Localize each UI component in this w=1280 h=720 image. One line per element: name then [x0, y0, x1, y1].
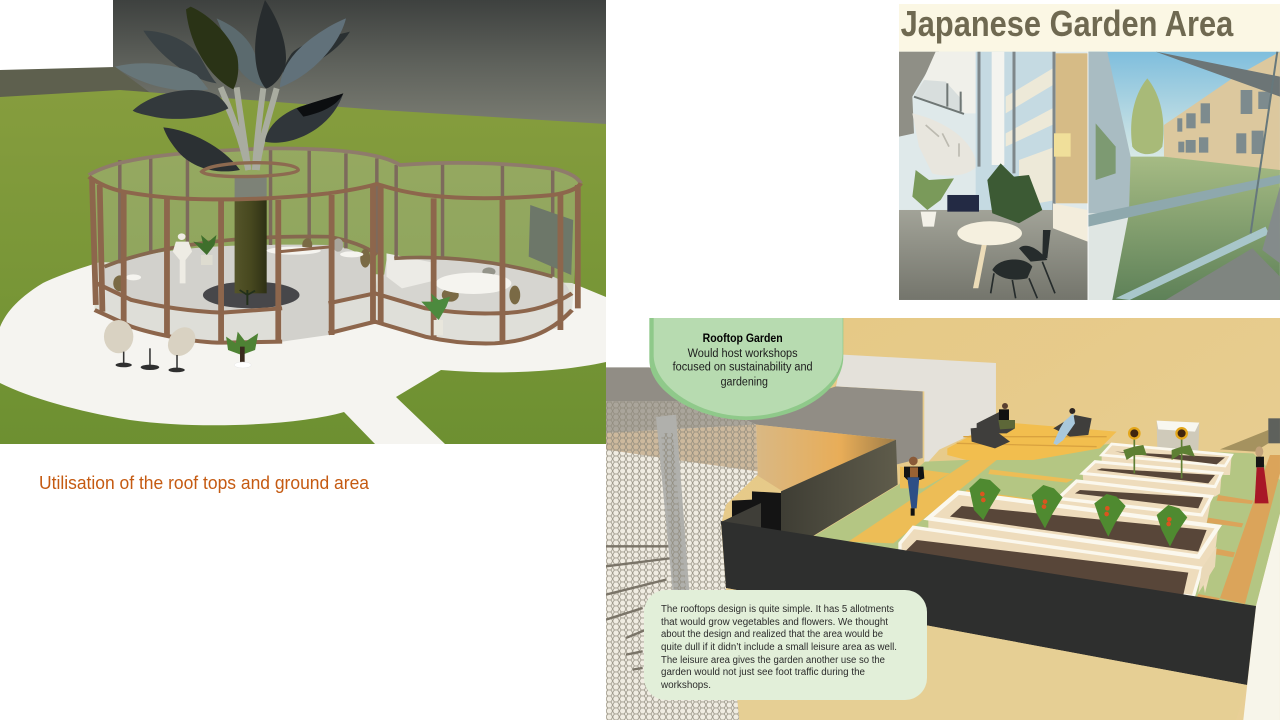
ceiling	[899, 52, 939, 137]
building	[1164, 52, 1280, 173]
inner chairs and tables	[113, 238, 520, 304]
caption: Utilisation of the roof tops and ground area	[39, 473, 370, 493]
floor	[899, 210, 1088, 300]
small seedling in pit	[240, 290, 255, 305]
back leaves	[143, 18, 350, 87]
egg chair left	[104, 320, 133, 367]
callout text: Would host workshops	[688, 346, 798, 360]
plant in pot	[193, 235, 216, 265]
potted palm outside	[226, 332, 258, 368]
lawn	[0, 90, 606, 444]
sofas	[947, 195, 979, 212]
green floor	[813, 443, 1280, 606]
tomato plants	[969, 478, 1187, 547]
dark grey planter wall	[721, 521, 1256, 685]
spiral stair lower	[912, 113, 976, 176]
brick pier	[1056, 53, 1088, 203]
callout: rooftop design description: The leisure area gives the garden another use so the	[661, 655, 885, 666]
white stone block	[836, 355, 996, 466]
pavilion interior, back half	[89, 148, 581, 344]
sofas	[971, 412, 1092, 448]
heading: Japanese Garden Area	[901, 3, 1234, 44]
heading band	[899, 4, 1280, 53]
column	[656, 415, 689, 591]
callout: rooftop design description: The rooftops design is quite simple. It has 5 allotments	[661, 604, 894, 615]
callout text: gardening	[721, 374, 768, 388]
egg chairs and stools	[104, 320, 201, 372]
planter 2	[928, 493, 1218, 593]
reclining woman	[1053, 408, 1075, 445]
spiral stair upper	[921, 52, 976, 114]
hexagon mesh	[606, 401, 758, 720]
plant behind front rail	[421, 293, 450, 335]
callout text: Rooftop Garden	[703, 331, 783, 345]
glass tint	[89, 150, 578, 310]
amber interior	[756, 425, 896, 491]
window sill	[1116, 227, 1269, 300]
render: rooftop garden	[606, 318, 1280, 720]
back wall	[650, 318, 1280, 720]
round table	[957, 221, 1022, 288]
white side strip	[1243, 513, 1280, 720]
lower sand floor	[726, 588, 1247, 720]
leisure deck	[947, 422, 1117, 460]
pillar	[1262, 187, 1280, 263]
callout: rooftop design description	[644, 590, 927, 700]
cabinet	[1053, 203, 1088, 242]
walking woman	[904, 457, 924, 516]
top beam	[1156, 52, 1280, 97]
inner dark wall	[779, 440, 898, 536]
pavilion front frame	[89, 177, 581, 372]
woman in red	[1255, 446, 1269, 503]
egg chair right	[168, 327, 196, 372]
tree	[1131, 78, 1163, 154]
tree collar ring	[202, 163, 298, 177]
low shadowed wall band	[0, 67, 150, 97]
door block	[732, 491, 781, 531]
mannequin	[173, 233, 192, 283]
tree pit	[203, 282, 300, 308]
right lobe white bench	[387, 253, 437, 288]
roof deck and allotments	[813, 403, 1280, 720]
photo: interior with spiral stair	[899, 52, 1088, 300]
left floor	[101, 245, 377, 343]
planter 4	[1083, 462, 1222, 497]
tree trunk	[235, 198, 267, 293]
white block	[1157, 421, 1199, 452]
panel: Japanese Garden Area	[899, 3, 1280, 300]
callout: rooftop design description: workshops.	[660, 680, 711, 691]
wooden rails	[89, 177, 581, 343]
callout: rooftop design description: about the design and realized that the area would be	[661, 629, 883, 640]
wall screen	[529, 205, 573, 275]
front leaves	[115, 63, 208, 91]
wooden posts	[92, 178, 578, 343]
tree canopy	[115, 0, 350, 177]
planter 3	[1058, 481, 1212, 523]
potted plant left	[912, 170, 954, 227]
perforated screen and stair	[606, 355, 996, 720]
grass	[1109, 157, 1280, 300]
glass facade left	[1088, 52, 1131, 217]
seated woman	[998, 403, 1015, 429]
callout text: focused on sustainability and	[673, 360, 813, 374]
tomatoes	[980, 492, 1172, 526]
window wall	[976, 52, 1056, 213]
black chairs	[991, 230, 1055, 298]
callout: rooftop design description: garden would not just see foot traffic during the	[661, 667, 865, 678]
decking paths	[848, 460, 1073, 543]
timber boardwalk	[1197, 455, 1280, 604]
ficus plant	[987, 163, 1042, 223]
floor	[1166, 248, 1280, 300]
stair treads	[606, 546, 673, 670]
callout: rooftop design description: that would grow vegetables and flowers. We thought	[661, 617, 888, 628]
render: pavilion and tree on ground area	[0, 0, 606, 444]
branches	[221, 87, 277, 170]
corner grey block	[1268, 418, 1280, 443]
corner shadow	[1220, 430, 1268, 452]
back posts and rim	[89, 148, 581, 277]
sunflowers	[1123, 427, 1195, 478]
callout shape	[649, 318, 843, 420]
wall return	[721, 503, 761, 529]
right floor	[377, 258, 571, 344]
window rail	[1088, 175, 1280, 227]
background wall	[113, 0, 606, 130]
callout: Rooftop Garden	[649, 318, 843, 420]
planter 1	[900, 527, 1217, 597]
round white tables	[126, 247, 511, 294]
concrete top	[606, 367, 923, 465]
side table	[141, 348, 159, 370]
photo: window view	[1088, 52, 1280, 300]
planter 5	[1102, 444, 1232, 475]
screen base	[606, 401, 758, 720]
callout: rooftop design description: quite dull if it didn’t include a small leisure area as well.	[661, 642, 897, 653]
lower glass panel tint	[105, 290, 571, 342]
white circular paving	[0, 262, 606, 444]
